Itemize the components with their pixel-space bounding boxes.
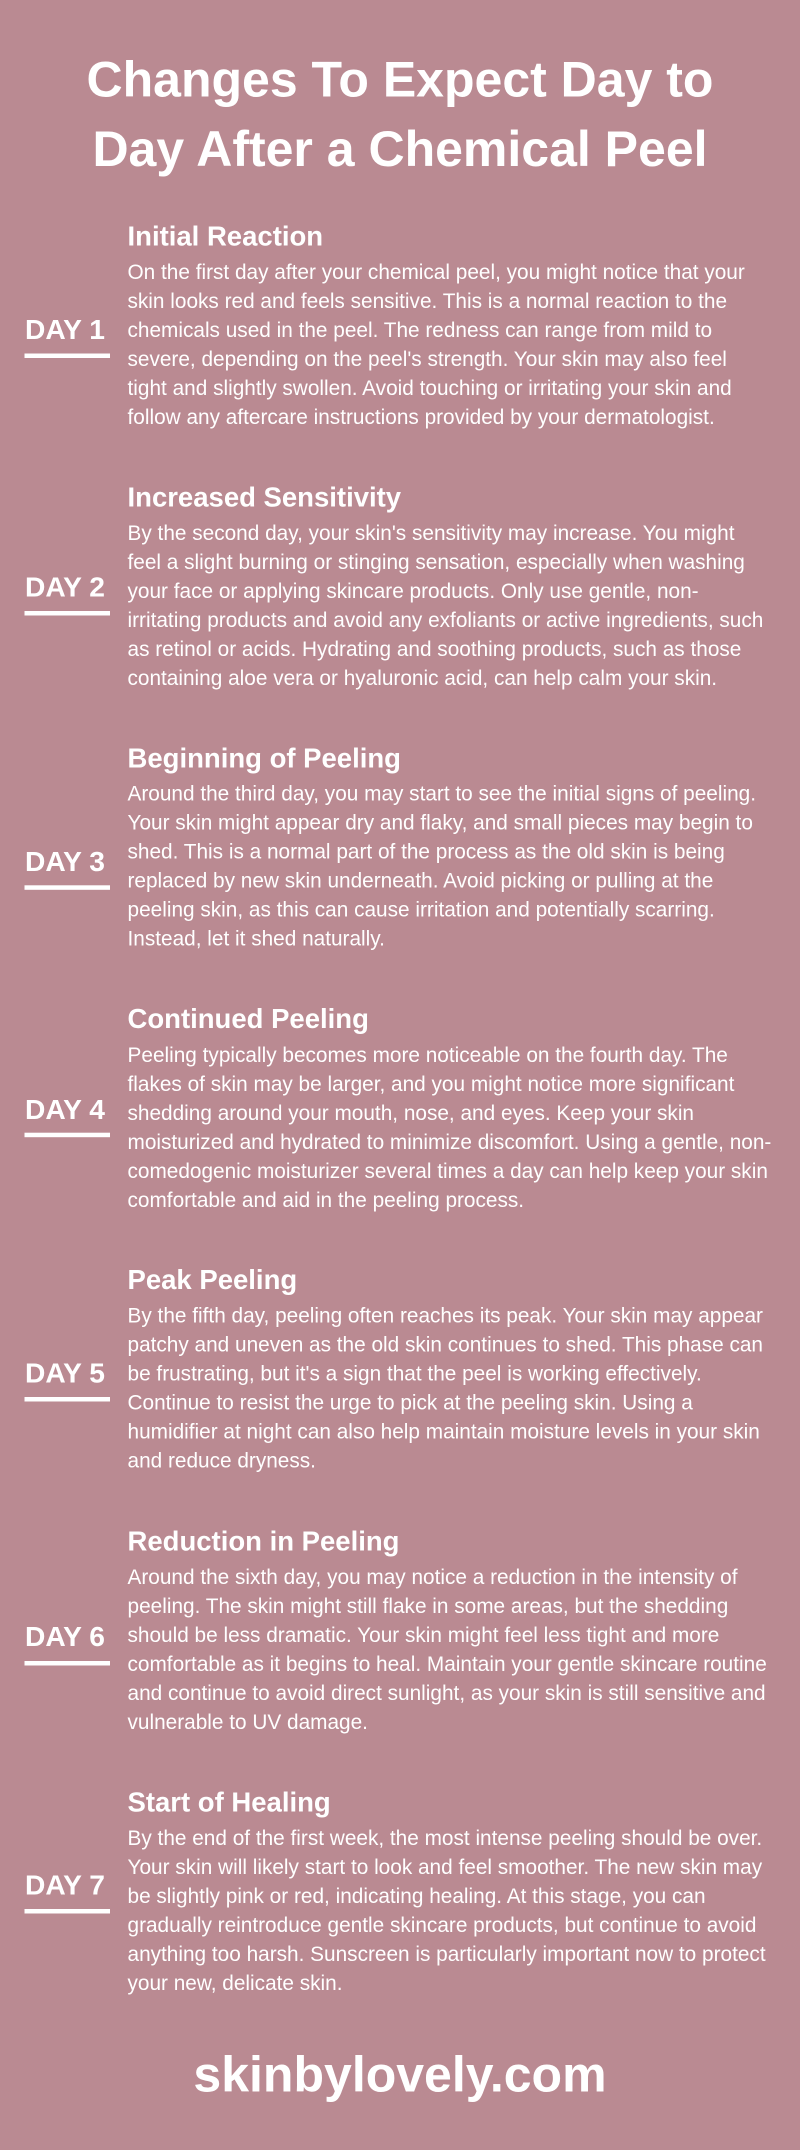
day 7 text: anything too harsh. Sunscreen is particularly important now to protect — [128, 1943, 766, 1966]
day 6 text — [128, 1566, 767, 1734]
day 2 heading: Increased Sensitivity — [128, 482, 402, 513]
day 4 text: comfortable and aid in the peeling process. — [128, 1189, 524, 1212]
day 7 text — [128, 1827, 766, 1995]
day 5 heading: Peak Peeling — [128, 1264, 297, 1295]
day 7 label: DAY 7 — [25, 1869, 105, 1901]
panel: day 4 — [24, 1003, 771, 1212]
day 5 text: be frustrating, but it's a sign that the peel is working effectively. — [128, 1363, 702, 1386]
day 5 label: DAY 5 — [25, 1356, 105, 1388]
day 2 label — [24, 571, 110, 616]
day 4 label: DAY 4 — [25, 1093, 105, 1125]
day 7 text: By the end of the first week, the most intense peeling should be over. — [128, 1827, 762, 1850]
panel: day 7 — [24, 1787, 766, 1995]
day 3 text: replaced by new skin underneath. Avoid picking or pulling at the — [128, 870, 713, 893]
day 1 text: tight and slightly swollen. Avoid touching or irritating your skin and — [128, 377, 732, 400]
day 2 label: DAY 2 — [25, 571, 105, 603]
day 2 text: as retinol or acids. Hydrating and soothing products, such as those — [128, 638, 741, 661]
day 4 text: Peeling typically becomes more noticeable on the fourth day. The — [128, 1044, 728, 1067]
day 2 text: feel a slight burning or stinging sensation, especially when washing — [128, 551, 745, 574]
day 5 text: patchy and uneven as the old skin continues to shed. This phase can — [128, 1334, 763, 1357]
day 4 heading: Continued Peeling — [128, 1003, 369, 1034]
day 1 text: chemicals used in the peel. The redness can range from mild to — [128, 319, 712, 342]
day 2 text: By the second day, your skin's sensitivity may increase. You might — [128, 522, 735, 545]
day 4 label — [24, 1093, 110, 1137]
day 7 text: gradually reintroduce gentle skincare products, but continue to avoid — [128, 1914, 756, 1937]
day 6 label: DAY 6 — [25, 1620, 105, 1652]
day 7 label — [24, 1869, 110, 1914]
day 5 text: humidifier at night can also help maintain moisture levels in your skin — [128, 1421, 760, 1444]
day 6 heading: Reduction in Peeling — [128, 1526, 399, 1557]
day 3 text: Your skin might appear dry and flaky, and small pieces may begin to — [128, 812, 753, 835]
day 5 text: Continue to resist the urge to pick at the peeling skin. Using a — [128, 1392, 693, 1415]
day 5 label — [24, 1356, 110, 1402]
day 1 text: On the first day after your chemical peel, you might notice that your — [128, 261, 745, 284]
day 6 text: Around the sixth day, you may notice a reduction in the intensity of — [128, 1566, 738, 1589]
day 1 label — [24, 313, 110, 358]
day 1 text: follow any aftercare instructions provided by your dermatologist. — [128, 406, 715, 429]
title: Changes To Expect Day to — [87, 52, 713, 108]
day 6 text: and continue to avoid direct sunlight, as your skin is still sensitive and — [128, 1682, 766, 1705]
day 3 label: DAY 3 — [25, 845, 105, 877]
day 4 text: shedding around your mouth, nose, and eyes. Keep your skin — [128, 1102, 694, 1125]
day 4 text: moisturized and hydrated to minimize discomfort. Using a gentle, non- — [128, 1131, 771, 1154]
footer: website: skinbylovely.com — [193, 2047, 607, 2103]
day 6 text: vulnerable to UV damage. — [128, 1711, 368, 1734]
panel: day 3 — [24, 742, 756, 951]
day 2 text: irritating products and avoid any exfoliants or active ingredients, such — [128, 609, 763, 632]
day 5 text — [128, 1305, 763, 1473]
panel: day 5 — [24, 1264, 763, 1473]
day 4 text: flakes of skin may be larger, and you might notice more significant — [128, 1073, 735, 1096]
panel: day 6 — [24, 1526, 767, 1734]
day 4 text: comedogenic moisturizer several times a day can help keep your skin — [128, 1160, 768, 1183]
day 3 label — [24, 845, 110, 890]
panel: day 2 — [24, 482, 763, 690]
day 1 text — [128, 261, 745, 429]
day 5 text: and reduce dryness. — [128, 1450, 316, 1473]
day 2 text — [128, 522, 763, 690]
day 3 text: Around the third day, you may start to see the initial signs of peeling. — [128, 783, 756, 806]
day 3 text: Instead, let it shed naturally. — [128, 928, 385, 951]
day 2 text: containing aloe vera or hyaluronic acid, can help calm your skin. — [128, 667, 717, 690]
day 4 text — [128, 1044, 771, 1212]
title: Day After a Chemical Peel — [92, 121, 708, 177]
title — [87, 52, 713, 177]
day 2 text: your face or applying skincare products. Only use gentle, non- — [128, 580, 699, 603]
day 7 text: be slightly pink or red, indicating healing. At this stage, you can — [128, 1885, 706, 1908]
day 6 text: comfortable as it begins to heal. Maintain your gentle skincare routine — [128, 1653, 767, 1676]
day 5 text: By the fifth day, peeling often reaches its peak. Your skin may appear — [128, 1305, 763, 1328]
day 1 heading: Initial Reaction — [128, 221, 323, 252]
day 3 text — [128, 783, 756, 951]
day 7 text: your new, delicate skin. — [128, 1972, 343, 1995]
day 7 heading: Start of Healing — [128, 1787, 331, 1818]
day 6 label — [24, 1620, 110, 1666]
day 1 text: skin looks red and feels sensitive. This is a normal reaction to the — [128, 290, 727, 313]
day 7 text: Your skin will likely start to look and feel smoother. The new skin may — [128, 1856, 763, 1879]
panel: day 1 — [24, 221, 745, 429]
day 3 text: shed. This is a normal part of the process as the old skin is being — [128, 841, 725, 864]
day 3 text: peeling skin, as this can cause irritation and potentially scarring. — [128, 899, 715, 922]
day 6 text: peeling. The skin might still flake in some areas, but the shedding — [128, 1595, 728, 1618]
day 1 label: DAY 1 — [25, 313, 105, 345]
day 1 text: severe, depending on the peel's strength. Your skin may also feel — [128, 348, 727, 371]
day 3 heading: Beginning of Peeling — [128, 742, 401, 773]
day 6 text: should be less dramatic. Your skin might feel less tight and more — [128, 1624, 719, 1647]
